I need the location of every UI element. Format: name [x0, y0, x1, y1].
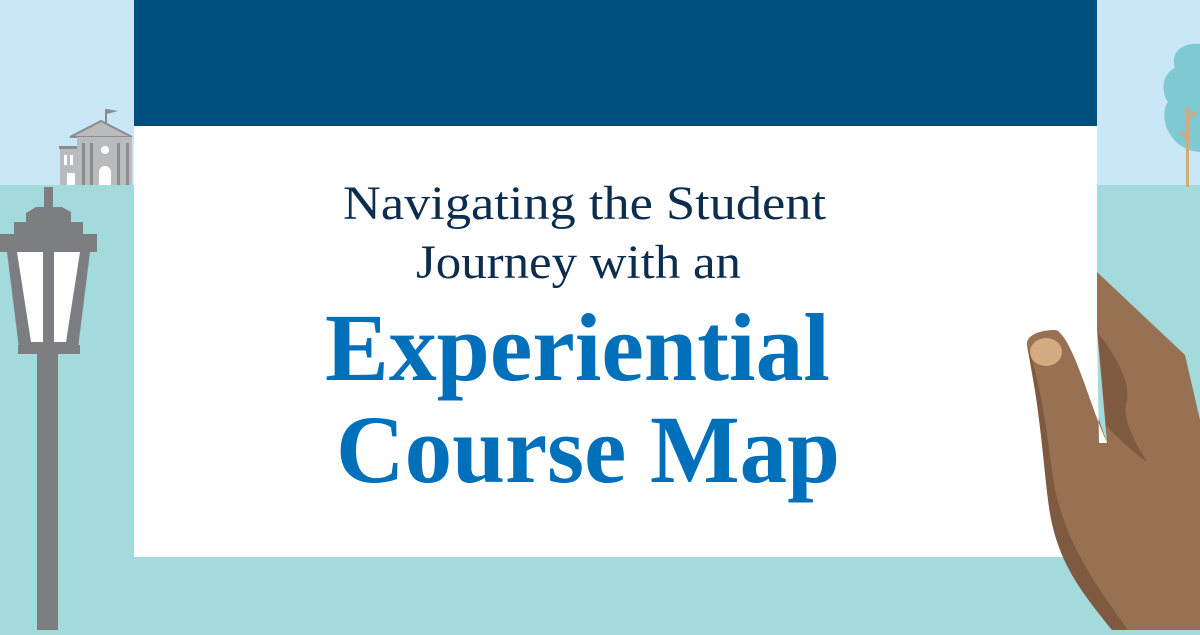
title: main heading: Course Map	[336, 396, 840, 503]
title: subtitle lines	[343, 177, 827, 289]
title: subtitle lines: Navigating the Student	[343, 177, 827, 230]
title: main heading	[325, 294, 840, 503]
sky background	[0, 0, 1200, 185]
title: main heading: Experiential	[325, 294, 830, 401]
ground background	[0, 185, 1200, 630]
icon: campus building	[59, 109, 132, 185]
icon: tree	[1164, 44, 1200, 187]
icon: street lamp	[0, 187, 97, 630]
title: subtitle lines: Journey with an	[416, 236, 741, 289]
header band	[134, 0, 1097, 126]
icon: hand holding card	[1027, 272, 1200, 630]
panel: title card	[134, 0, 1097, 557]
